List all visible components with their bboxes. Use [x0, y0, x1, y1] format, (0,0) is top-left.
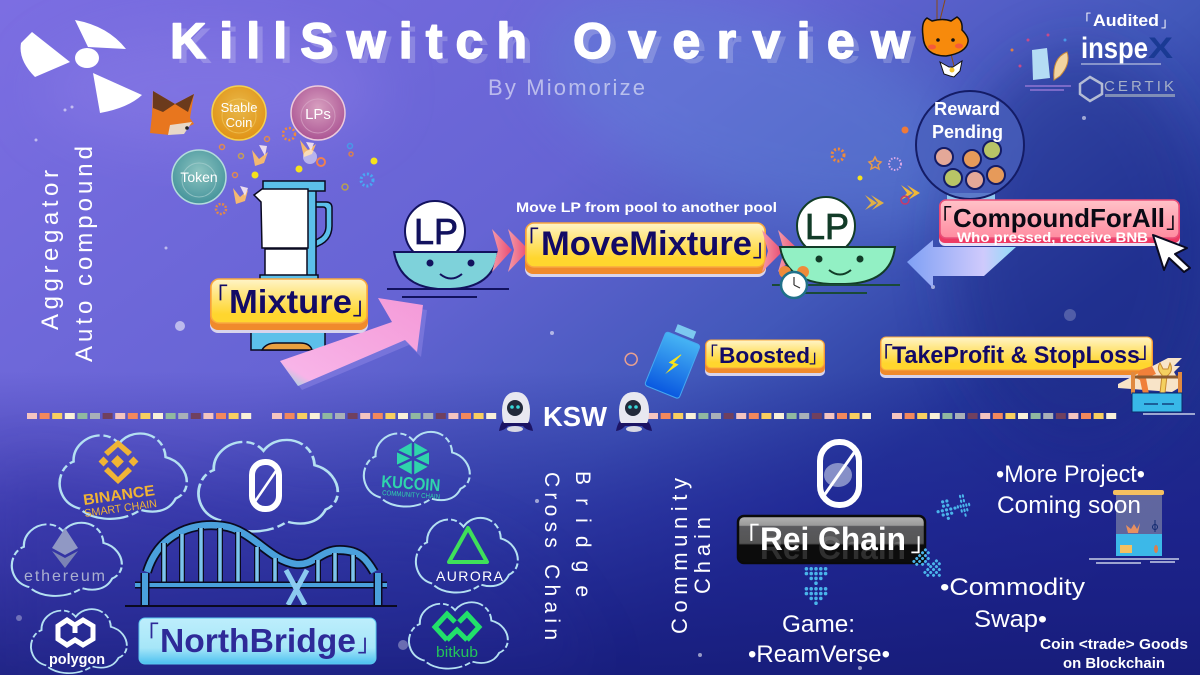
arrow: chevrons from MoveMixture	[762, 230, 800, 272]
section label: aggregator: Auto compound	[71, 146, 98, 362]
bowl: LP blue	[387, 201, 509, 297]
coin: token	[172, 150, 226, 204]
text: commodity swap: •Commodity	[940, 574, 1085, 601]
icon: gumball machine: Pending	[932, 122, 1003, 142]
icon: battery	[618, 311, 705, 399]
button: Rei Chain: 「	[734, 522, 760, 552]
icon: audit document	[1010, 34, 1071, 90]
button: Boosted	[700, 340, 827, 376]
section label: community chain: Chain	[690, 517, 715, 594]
icon: cursor	[1153, 235, 1190, 272]
button: MoveMixture: MoveMixture	[541, 225, 752, 263]
button: CompoundForAll: Who pressed, receive BNB	[957, 229, 1148, 245]
button: TakeProfit & StopLoss: 」	[1138, 338, 1160, 363]
text: coin trade goods	[1040, 636, 1188, 672]
section label: bridge	[540, 471, 594, 640]
text: more project	[996, 461, 1145, 519]
title: KillSwitch	[176, 18, 533, 74]
bowl: LP blue: LP	[414, 211, 458, 252]
arrow: blue left	[907, 240, 1016, 288]
button: MoveMixture	[515, 223, 776, 277]
section label: community chain: Community	[667, 478, 692, 634]
arrow: chevrons to MoveMixture	[492, 229, 529, 272]
text: game: •ReamVerse•	[748, 641, 890, 668]
coin: stable coin	[212, 86, 266, 140]
button: CompoundForAll	[930, 200, 1188, 246]
audited logos: inspe	[1081, 32, 1148, 65]
audited logos: Audited	[1093, 11, 1159, 30]
button: Mixture	[204, 279, 376, 333]
cloud: Bitkub	[409, 602, 508, 669]
coin: LPs: LPs	[305, 106, 331, 123]
text: commodity swap	[940, 574, 1085, 633]
cloud: Binance Smart Chain: BINANCE	[82, 482, 156, 509]
icon: claw machine	[1089, 490, 1179, 563]
button: NorthBridge: 「	[135, 622, 159, 649]
cloud: Polygon: polygon	[49, 651, 105, 668]
audited logos	[1078, 11, 1175, 101]
section label: bridge: Bridge	[571, 471, 594, 597]
icon: robot right	[616, 392, 652, 432]
icon: gumball machine	[916, 91, 1024, 203]
section label: bridge: Cross Chain	[540, 472, 563, 640]
button: Boosted: 」	[809, 347, 827, 367]
coin: LPs	[291, 86, 345, 140]
button: Rei Chain: Rei Chain	[760, 521, 906, 557]
cloud: Ethereum	[12, 523, 122, 596]
label: KSW: KSW	[543, 401, 608, 432]
icon: orange cat charm	[922, 0, 968, 77]
button: Mixture: 」	[352, 293, 376, 320]
button: Mixture: 「	[204, 284, 228, 311]
button: TakeProfit & StopLoss: TakeProfit & StopLoss	[892, 342, 1140, 369]
icon: robot left	[499, 392, 533, 432]
bowl: LP green	[772, 197, 900, 293]
dotted arrows	[806, 495, 971, 603]
icon: bridge	[125, 525, 397, 606]
cloud: Bitkub: bitkub	[436, 644, 478, 661]
audited logos: 」	[1161, 15, 1174, 30]
button: MoveMixture: 」	[752, 235, 776, 262]
button: Rei Chain: Rei Chain	[760, 530, 906, 566]
caption: MoveMixture: Move LP from pool to another pool	[516, 199, 777, 215]
title: KillSwitch	[170, 13, 527, 69]
text: more project: •More Project•	[996, 461, 1145, 488]
button: TakeProfit & StopLoss: 「	[871, 343, 893, 368]
audited logos: X	[1148, 32, 1173, 65]
title: Overview	[579, 18, 916, 74]
button: Boosted: Boosted	[719, 343, 810, 368]
coin: token: Token	[180, 169, 218, 185]
text: commodity swap: Swap•	[974, 606, 1047, 633]
text: more project: Coming soon	[997, 492, 1141, 519]
cloud: Kucoin Community Chain: COMMUNITY CHAIN	[382, 490, 440, 501]
button: CompoundForAll: 」	[1166, 208, 1188, 233]
audited logos: CERTIK	[1104, 78, 1174, 95]
title: Overview	[573, 13, 910, 69]
button: MoveMixture: 「	[515, 227, 539, 254]
text: game: Game:	[782, 611, 855, 638]
arrow: pink up-right	[280, 298, 427, 390]
icon: metamask fox	[150, 91, 194, 135]
confetti near blender	[216, 128, 378, 214]
button: TakeProfit & StopLoss	[871, 337, 1160, 378]
text: game	[748, 611, 890, 668]
icon: gumball machine: Reward	[934, 99, 1000, 119]
divider line	[27, 413, 1117, 419]
icon: toolbox	[1118, 358, 1195, 414]
button: Mixture: Mixture	[229, 283, 352, 320]
button: Rei Chain	[734, 516, 937, 566]
cloud: Aurora: AURORA	[436, 568, 504, 584]
subtitle: By Miomorize	[488, 75, 645, 100]
cloud: Binance Smart Chain	[60, 434, 187, 520]
cloud: Kucoin Community Chain	[364, 432, 470, 507]
bowl: LP green: LP	[805, 206, 849, 247]
button: CompoundForAll: 「	[930, 205, 952, 230]
radiation icon	[21, 20, 142, 113]
icon: Rei zero logo	[820, 442, 859, 505]
text: coin trade goods: Coin <trade> Goods	[1040, 636, 1188, 653]
section label: aggregator	[37, 146, 98, 362]
cloud: Kucoin Community Chain: KUCOIN	[381, 472, 441, 495]
button: Rei Chain: 」	[910, 527, 937, 557]
button: NorthBridge	[135, 618, 382, 664]
button: CompoundForAll: CompoundForAll	[953, 203, 1165, 233]
coin: stable coin: Coin	[226, 115, 252, 130]
confetti near LP	[832, 126, 920, 210]
coin: stable coin: Stable	[221, 100, 257, 115]
text: coin trade goods: on Blockchain	[1063, 655, 1165, 672]
section label: aggregator: Aggregator	[37, 170, 64, 330]
button: NorthBridge: 」	[358, 630, 382, 657]
cloud: Rei zero	[199, 440, 338, 531]
title	[170, 13, 916, 74]
icon: alarm clock	[779, 266, 809, 298]
button: Boosted: 「	[700, 344, 718, 364]
cloud: Binance Smart Chain: SMART CHAIN	[84, 498, 158, 520]
cloud: Aurora	[416, 518, 518, 593]
cloud: Polygon	[31, 609, 127, 673]
cloud: Ethereum: ethereum	[24, 568, 105, 585]
audited logos: 「	[1078, 12, 1091, 27]
button: NorthBridge: NorthBridge	[160, 622, 356, 659]
icon: blender	[251, 181, 332, 350]
section label: community chain	[667, 478, 715, 634]
